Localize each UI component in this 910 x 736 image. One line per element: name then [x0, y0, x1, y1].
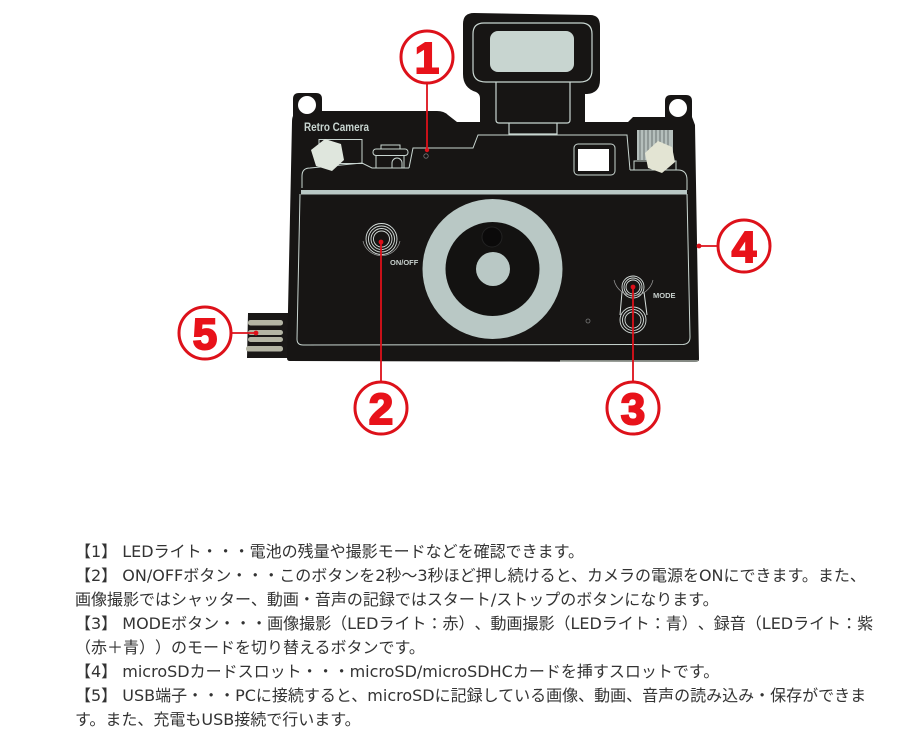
item 3: （赤＋青））のモードを切り替えるボタンです。 — [75, 638, 425, 657]
callout 4: microSD slot — [697, 220, 770, 272]
item 2: 画像撮影ではシャッター、動画・音声の記録ではスタート/ストップのボタンになります。 — [75, 590, 719, 609]
item 2: 【2】 ON/OFFボタン・・・このボタンを2秒～3秒ほど押し続けると、カメラの電源をONにできます。また、 — [75, 566, 866, 585]
icon: USB connector — [246, 313, 290, 358]
label: Retro Camera: Retro Camera — [304, 120, 369, 134]
item 5: 【5】 USB端子・・・PCに接続すると、microSDに記録している画像、動画、音声の読み込み・保存ができま — [75, 686, 866, 705]
item 3 — [75, 614, 873, 657]
item 4: 【4】 microSDカードスロット・・・microSD/microSDHCカードを挿すスロットです。 — [75, 662, 719, 681]
right hex standoff — [645, 141, 675, 173]
item 5 — [75, 686, 866, 729]
small hole — [586, 319, 590, 323]
lens ring — [422, 199, 562, 339]
viewfinder window — [578, 149, 609, 171]
dial grill — [637, 130, 673, 160]
callout 3: MODE — [607, 285, 659, 434]
top plate linework — [302, 135, 687, 190]
callout 1: LED — [401, 31, 453, 152]
hot shoe icon — [373, 145, 408, 168]
item 5: す。また、充電もUSB接続で行います。 — [75, 710, 361, 729]
item 1: 【1】 LEDライト・・・電池の残量や撮影モードなどを確認できます。 — [75, 542, 584, 561]
LED hole — [424, 154, 428, 158]
label: ON/OFF: ON/OFF — [390, 258, 419, 267]
callout 2: ON/OFF: 2 — [369, 385, 393, 434]
callout 1: LED: 1 — [415, 34, 439, 83]
lower panel outline — [297, 194, 690, 345]
callout 3: MODE: 3 — [621, 385, 645, 434]
callout 2: ON/OFF — [355, 240, 407, 434]
callout 5: USB: 5 — [193, 310, 217, 359]
left hex standoff — [311, 139, 344, 171]
callout 5: USB — [179, 307, 258, 359]
body bottom edge highlight — [560, 360, 698, 362]
ON/OFF button — [363, 224, 400, 256]
camera board — [246, 13, 699, 362]
MODE button — [614, 276, 653, 333]
flash unit — [473, 23, 592, 134]
item 3: 【3】 MODEボタン・・・画像撮影（LEDライト：赤）、動画撮影（LEDライト：青）、録音（LEDライト：紫 — [75, 614, 873, 633]
label: MODE: MODE — [653, 291, 676, 300]
divider bar — [301, 190, 687, 194]
item 2 — [75, 566, 866, 609]
camera body silhouette — [287, 13, 699, 362]
callout 4: microSD slot: 4 — [732, 223, 757, 272]
